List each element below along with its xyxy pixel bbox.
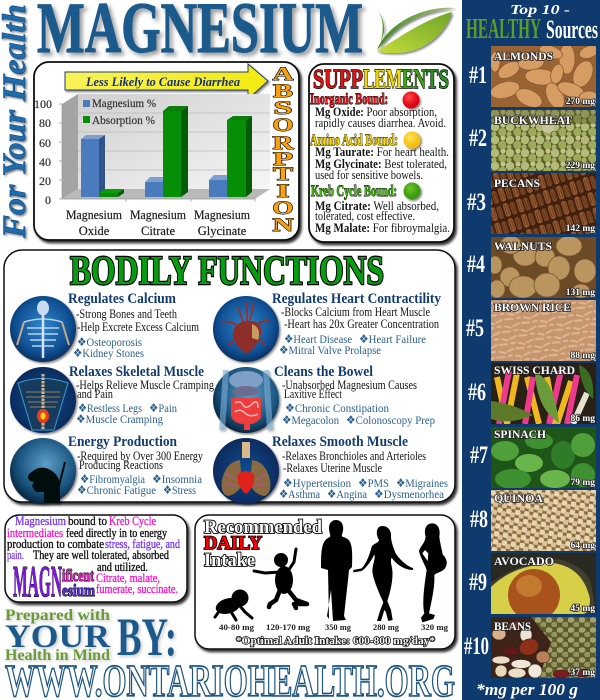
food tile: buckwheat: BUCKWHEAT [494,113,572,127]
y axis labels: 60 [39,136,51,150]
explanatory text: bound to [68,514,107,528]
rank numbers: #5 [466,315,484,342]
food tile: almonds [488,42,600,112]
text: cleans the bowel: ❖Chronic Constipation [285,401,389,415]
category labels: Citrate [141,224,175,238]
credit: prepared with your health in mind by [5,607,177,667]
food tile: spinach [491,427,596,489]
food tile: walnuts: 131 mg [566,288,595,298]
text: relaxes smooth muscle: ❖Migraines [396,476,448,490]
rank numbers: #1 [469,62,487,89]
food tile: avocado: AVOCADO [494,554,554,568]
wordmark: magnificent magnesium [13,557,95,606]
food tile: avocado: 45 mg [570,604,595,614]
food tile: pecans: PECANS [494,176,540,190]
text: energy production: ❖Stress [163,483,196,497]
panel: recommended daily intake [195,515,455,649]
panel: supplements [309,64,454,242]
silhouette: woman [353,526,413,621]
wordmark: magnificent magnesium: MAGN [13,557,62,606]
panel: bodily functions [4,247,455,504]
explanatory text: intermediates [7,526,63,540]
food tile: brown rice [491,300,596,361]
food tile: brown rice: 88 mg [570,351,595,361]
sidebar heading: Top 10 - [510,3,570,18]
legend [83,96,156,127]
kreb cycle bound: Mg Malate: For fibroymalgia. [315,220,450,235]
text: relaxes smooth muscle: ❖Asthma [279,487,321,501]
text: relaxes smooth muscle: ❖PMS [358,476,389,490]
sidebar: top 10 healthy sources [462,0,600,700]
bar chart: magnesium vs absorption [34,94,270,238]
food tile: quinoa: 64 mg [570,541,595,551]
recommended daily intake heading: Intake [204,550,255,571]
text: relaxes smooth muscle: -Relaxes Uterine Muscle [283,461,382,475]
text: relaxes smooth muscle: ❖Dysmenorhea [374,487,445,501]
icon: exhausted person on chair [10,438,76,504]
food tile: avocado [491,553,596,621]
text: regulates heart contractility: ❖Heart Failure [359,332,426,346]
panel: absorption chart [34,62,299,240]
vertical heading: absorption: P [273,149,294,170]
inorganic bound [310,91,446,130]
explanatory text: Kreb Cycle [109,514,156,528]
amino acid bound: Mg Glycinate: Best tolerated, [315,156,447,171]
explanatory text: feed directly in to energy [66,526,168,540]
inorganic bound: Inorganic Bound: [310,91,388,108]
dose labels: 350 mg [325,622,352,632]
text: relaxes skeletal muscle: ❖Pain [149,401,177,415]
recommended daily intake heading [204,517,322,571]
food tile: swiss chard: 86 mg [570,414,595,424]
amino acid bound [310,132,449,182]
food tile: quinoa: QUINOA [494,491,543,505]
panel: magnificent magnesium [5,514,187,606]
explanatory text: stress, fatigue, and [105,537,181,551]
text: regulates heart contractility: -Heart has 20x Greater Concentration [284,317,440,331]
text: regulates calcium: -Help Excrete Excess Calcium [77,320,199,334]
category labels: Magnesium [130,208,186,222]
text: regulates calcium [68,291,199,360]
rank numbers: #8 [470,506,488,533]
vertical heading: absorption: N [272,215,294,236]
text: regulates calcium: ❖Kidney Stones [73,346,144,360]
food tile: walnuts [488,236,596,298]
text: cleans the bowel: -Unabsorbed Magnesium Causes [282,378,417,392]
rank numbers: #7 [470,442,488,469]
kreb cycle bound: Kreb Cycle Bound: [311,183,397,200]
category labels: Oxide [79,224,110,238]
text: relaxes skeletal muscle: ❖Restless Legs [78,401,142,415]
dose labels [219,622,449,632]
text: energy production: -Required by Over 300 Energy [77,449,204,463]
rank numbers: #4 [467,251,485,278]
vertical heading: absorption: R [272,133,294,154]
icon: green leaf [377,8,456,53]
dose labels: 320 mg [421,622,449,632]
explanatory text: They are well tolerated, absorbed [33,548,170,562]
supplements heading: SUPP [313,64,363,94]
bars: magnesium oxide [81,135,124,197]
y axis labels: 40 [39,155,51,169]
wordmark: magnificent magnesium: esium [62,581,95,600]
rank numbers: #3 [467,189,486,216]
food tile: buckwheat [491,110,596,171]
silhouette: child [254,549,307,608]
vertical heading: absorption: A [272,64,294,85]
category labels: Magnesium [194,208,250,222]
text: energy production [68,434,204,497]
text: relaxes skeletal muscle: and Pain [77,387,114,401]
kreb cycle bound: Mg Citrate: Well absorbed, [315,198,439,213]
icon: spine and back [10,367,76,433]
text: energy production: Producing Reactions [79,458,163,472]
food tile: walnuts: WALNUTS [494,239,552,253]
text: energy production: ❖Chronic Fatigue [77,483,156,497]
bars: magnesium glycinate [209,116,252,197]
text: relaxes skeletal muscle: ❖Muscle Cramping [76,412,163,426]
vertical heading: absorption: T [273,164,293,185]
text: energy production: ❖Insomnia [152,472,203,486]
text: cleans the bowel: Laxitive Effect [284,387,342,401]
food tile: spinach: SPINACH [494,427,547,441]
explanatory text: pain. [7,548,24,562]
sidebar heading: HEALTHY [466,14,541,45]
credit: prepared with your health in mind by: Prepared with [5,607,110,624]
food tile: brown rice: BROWN RICE [494,300,571,314]
y axis labels: 20 [39,174,51,188]
arrow: less likely to cause diarrhea [65,64,268,99]
dose labels: 120-170 mg [266,622,311,632]
text: relaxes skeletal muscle: -Helps Relieve Muscle Cramping [76,378,215,392]
explanatory text [7,514,181,596]
text: relaxes smooth muscle: ❖Hypertension [283,476,351,490]
category labels [66,208,250,238]
credit: prepared with your health in mind by: YOUR [5,619,111,655]
text: regulates heart contractility [272,291,442,357]
text: relaxes smooth muscle: Relaxes Smooth Muscle [272,434,409,450]
rank numbers: #2 [469,125,487,152]
text: relaxes skeletal muscle [69,364,215,426]
silhouette: baby [215,590,252,620]
food tile: pecans: 142 mg [566,224,595,234]
text: regulates heart contractility: -Blocks Calcium from Heart Muscle [281,305,430,319]
supplements heading: TS [426,64,449,94]
y axis labels [34,97,52,207]
y axis labels: 80 [39,116,51,130]
text: relaxes smooth muscle: ❖Angina [327,487,368,501]
text: energy production: Energy Production [68,434,177,450]
vertical heading: absorption [272,64,294,236]
text: relaxes smooth muscle [272,434,448,501]
vertical heading: absorption: O [272,115,294,136]
dose labels: 280 mg [373,622,400,632]
text: regulates heart contractility: Regulates Heart Contractility [272,291,442,307]
category labels: Magnesium [66,208,122,222]
explanatory text: production to combate [7,537,104,551]
text: cleans the bowel: ❖Megacolon [282,413,339,427]
text: regulates calcium: Regulates Calcium [68,291,176,307]
rank numbers: #9 [469,569,487,596]
amino acid bound: Mg Taurate: For heart health. [315,144,449,159]
food tile: swiss chard: SWISS CHARD [494,363,575,377]
inorganic bound: Mg Oxide: Poor absorption, [315,104,437,119]
silhouette: pregnant woman [419,523,447,622]
text: cleans the bowel: ❖Colonoscopy Prep [346,413,435,427]
food tile: spinach: 79 mg [570,478,595,488]
text: regulates heart contractility: ❖Mitral Valve Prolapse [279,343,381,357]
explanatory text: and utilized. [97,560,148,574]
icon: lungs [213,438,279,504]
icon: skeleton [10,296,76,362]
vertical heading: absorption: O [272,198,294,219]
bars: magnesium citrate [145,106,188,197]
legend: Magnesium % [92,96,156,110]
food tile: beans: BEANS [494,619,531,633]
rank numbers: #10 [464,633,489,660]
text: cleans the bowel: Cleans the Bowel [274,364,373,380]
supplements heading [313,64,449,94]
kreb cycle bound [311,182,450,235]
rank numbers [464,62,489,660]
y axis labels: 0 [45,193,51,207]
recommended daily intake heading: Recommended [204,517,322,538]
vertical heading: absorption: S [274,98,292,119]
y axis labels: 100 [34,97,52,111]
amino acid bound: Amino Acid Bound: [310,132,398,149]
explanatory text: Magnesium [15,514,66,528]
supplements heading: EN [402,64,426,94]
vertical heading: absorption: I [276,181,290,202]
text: regulates calcium: ❖Osteoporosis [77,335,142,349]
dose labels: 40-80 mg [219,622,255,632]
category labels: Glycinate [198,224,247,238]
footnote: mg per 100 g: *mg per 100 g [476,680,579,699]
legend: Absorption % [92,113,155,127]
vertical heading: absorption: B [273,81,293,102]
text: cleans the bowel [274,364,435,427]
supplements heading: LEM [363,64,402,94]
inorganic bound: rapidly causes diarrhea. Avoid. [315,115,446,130]
icon: heart [213,296,279,362]
food tile: beans [491,617,596,678]
bodily functions heading: BODILY FUNCTIONS [70,247,384,293]
credit: prepared with your health in mind by: BY: [117,607,177,667]
text: relaxes smooth muscle: -Relaxes Bronchioles and Arterioles [282,449,426,463]
text: relaxes skeletal muscle: Relaxes Skeletal Muscle [69,364,205,380]
food tile: pecans [491,173,596,234]
food tile: beans: 37 mg [570,668,595,678]
recommended daily intake heading: DAILY [204,533,262,554]
text: energy production: ❖Fibromyalgia [80,472,146,486]
arrow: less likely to cause diarrhea: Less Likely to Cause Diarrhea [85,75,240,89]
credit: prepared with your health in mind by: Health in Mind [5,647,110,664]
food tile: almonds: 270 mg [566,97,595,107]
text: regulates calcium: -Strong Bones and Teeth [76,307,178,321]
kreb cycle bound: tolerated, cost effective. [315,208,415,223]
rank numbers: #6 [468,379,486,406]
wordmark: magnificent magnesium: ificent [62,566,94,585]
text: regulates heart contractility: ❖Heart Disease [284,332,352,346]
optimal adult intake note: *Optimal Adult Intake: 600-800 mg/day* [236,635,436,647]
food tile: buckwheat: 229 mg [566,161,595,171]
food tile: almonds: ALMONDS [494,49,553,63]
silhouette: man [321,520,352,621]
explanatory text: Citrate, malate, [96,571,160,585]
amino acid bound: used for sensitive bowels. [315,167,423,182]
icon: bowel [213,367,279,433]
food tile: quinoa [491,490,596,551]
explanatory text: fumerate, succinate. [96,582,178,596]
food tile: swiss chard [491,363,596,424]
